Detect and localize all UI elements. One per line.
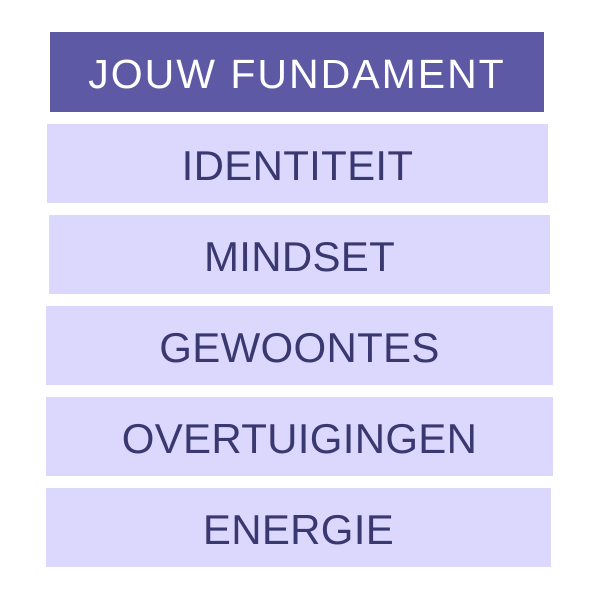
layer: overtuigingen (46, 397, 553, 476)
layer: identiteit: IDENTITEIT (182, 142, 413, 188)
title: JOUW FUNDAMENT (88, 50, 506, 96)
layer: overtuigingen: OVERTUIGINGEN (122, 414, 477, 462)
layer: gewoontes (46, 306, 553, 385)
title (50, 32, 544, 112)
layer: energie: ENERGIE (203, 506, 394, 552)
layer: mindset (49, 215, 550, 294)
layer: gewoontes: GEWOONTES (159, 324, 440, 370)
layer: mindset: MINDSET (204, 232, 395, 280)
layer: energie (46, 488, 551, 567)
layer: identiteit (47, 124, 548, 203)
